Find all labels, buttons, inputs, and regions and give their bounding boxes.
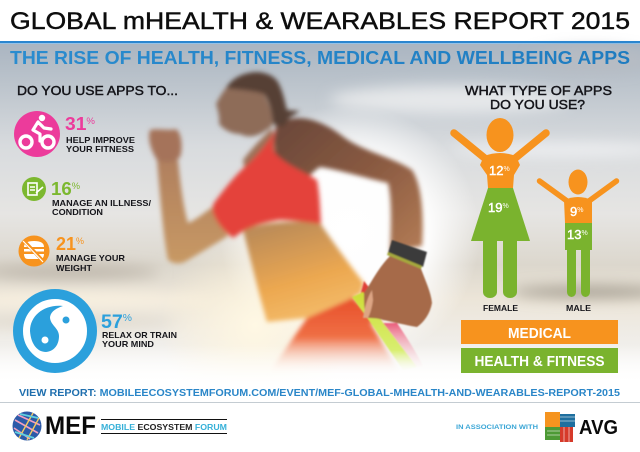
value: medical male: 9 xyxy=(570,204,577,219)
value: 16 xyxy=(51,179,71,199)
header rule xyxy=(0,41,640,44)
icon: cyclist xyxy=(14,111,60,157)
value: fitness male: 13 xyxy=(567,227,581,242)
legend: medical xyxy=(461,320,618,344)
logo: MEF xyxy=(12,412,227,440)
value: % xyxy=(86,116,95,126)
label: HELP IMPROVE xyxy=(66,135,135,145)
label: MANAGE AN ILLNESS/ xyxy=(52,198,152,208)
value: fitness female: 19 xyxy=(488,200,502,215)
heading: app types xyxy=(465,83,612,112)
icon: yin yang xyxy=(18,294,92,368)
stat: fitness: YOUR FITNESS xyxy=(66,144,134,154)
value: medical male: % xyxy=(577,207,583,214)
icon: crossed burger xyxy=(18,236,50,266)
legend: health and fitness: HEALTH & FITNESS xyxy=(474,353,604,370)
heading: app types: WHAT TYPE OF APPS xyxy=(465,83,612,98)
value: fitness female: % xyxy=(502,203,509,210)
stat: weight xyxy=(18,234,125,273)
legend: medical: MEDICAL xyxy=(508,325,571,342)
stat: illness: CONDITION xyxy=(52,207,103,217)
value: medical female: 12 xyxy=(489,163,503,178)
heading: do you use apps: DO YOU USE APPS TO... xyxy=(17,83,178,98)
background photo: sky with sun xyxy=(0,44,640,385)
label: female: FEMALE xyxy=(483,304,519,313)
report link: VIEW REPORT: MOBILEECOSYSTEMFORUM.COM/EVENT/MEF-GLOBAL-MHEALTH-AND-WEARABLES-REPORT-2015 xyxy=(19,388,620,399)
value: % xyxy=(123,313,132,324)
title: GLOBAL mHEALTH & WEARABLES REPORT 2015 xyxy=(10,8,630,35)
association label: IN ASSOCIATION WITH xyxy=(456,424,538,431)
label: RELAX OR TRAIN xyxy=(102,330,177,340)
heading: app types: DO YOU USE? xyxy=(490,97,585,112)
runner photo xyxy=(149,72,432,374)
value: 57 xyxy=(101,312,122,333)
label: male: MALE xyxy=(566,304,592,313)
value: medical female: % xyxy=(503,166,510,173)
stat: mind xyxy=(18,294,177,368)
stat: illness xyxy=(22,177,152,217)
subtitle: THE RISE OF HEALTH, FITNESS, MEDICAL AND WELLBEING APPS xyxy=(10,48,630,68)
logo: AVG xyxy=(545,412,618,442)
chart: female figure xyxy=(454,118,546,313)
value: % xyxy=(72,181,80,191)
value: 21 xyxy=(56,234,76,254)
logo: MEF: MEF xyxy=(45,412,96,440)
label: MANAGE YOUR xyxy=(56,253,125,263)
logo: MEF: MOBILE ECOSYSTEM FORUM xyxy=(101,423,227,432)
chart: male figure xyxy=(540,170,616,313)
stat: weight: WEIGHT xyxy=(56,263,93,273)
stat: fitness xyxy=(14,111,135,157)
icon: globe xyxy=(12,412,42,440)
value: 31 xyxy=(65,114,85,134)
value: fitness male: % xyxy=(581,230,588,237)
legend: health and fitness xyxy=(461,348,618,373)
logo: AVG: AVG xyxy=(579,417,618,439)
stat: mind: YOUR MIND xyxy=(102,339,154,349)
footer rule xyxy=(0,402,640,403)
icon: medical notes xyxy=(22,177,46,201)
value: % xyxy=(76,236,84,246)
